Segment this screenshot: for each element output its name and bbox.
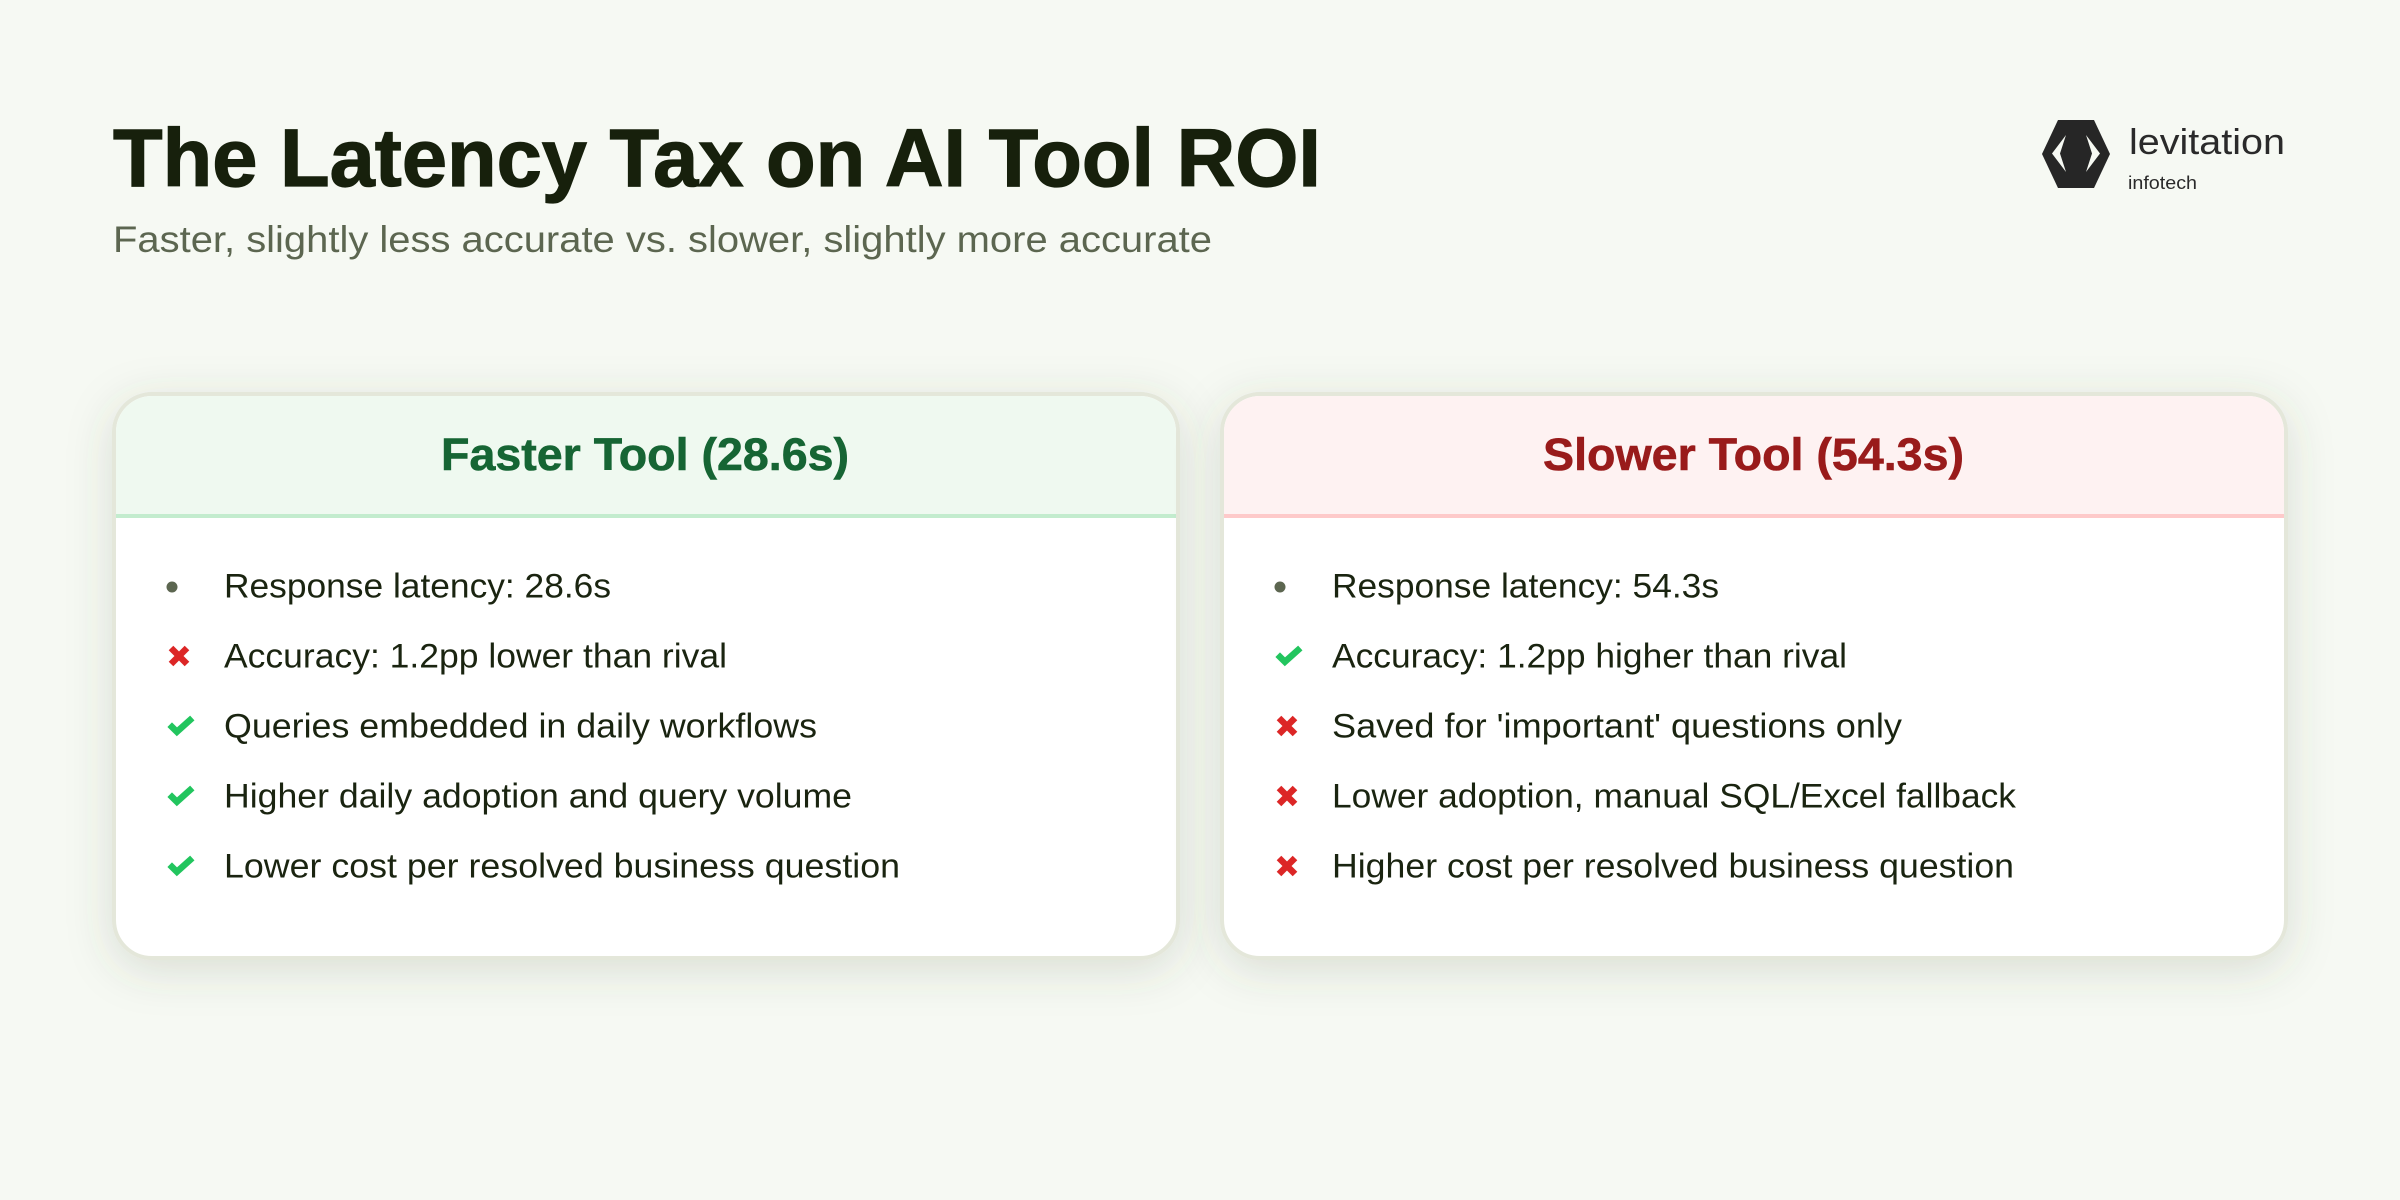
icon: check <box>1278 648 1300 662</box>
list item: Higher cost per resolved business question <box>1332 848 2014 886</box>
list item: Lower cost per resolved business question <box>224 848 900 886</box>
logo sub-wordmark: infotech <box>2128 173 2197 193</box>
list item: Response latency: 54.3s <box>1332 568 1719 606</box>
list item: Response latency: 28.6s <box>224 568 611 606</box>
icon: cross <box>171 648 187 664</box>
icon: cross <box>1279 718 1295 734</box>
list item: Lower adoption, manual SQL/Excel fallback <box>1332 778 2017 816</box>
icon: cross <box>1279 788 1295 804</box>
icon: neutral bullet <box>166 582 178 592</box>
title: The Latency Tax on AI Tool ROI <box>113 113 1321 204</box>
list item: Saved for 'important' questions only <box>1332 708 1902 746</box>
panel: faster tool <box>114 394 1178 958</box>
subtitle: Faster, slightly less accurate vs. slower, slightly more accurate <box>113 219 1212 260</box>
icon: hexagon with chevrons <box>2042 120 2110 188</box>
panel header: faster tool <box>116 396 1176 518</box>
logo wordmark: levitation <box>2129 121 2285 162</box>
panel header: faster tool: Faster Tool (28.6s) <box>441 429 849 480</box>
icon: cross <box>1279 858 1295 874</box>
list item: Higher daily adoption and query volume <box>224 778 852 816</box>
icon: check <box>170 718 192 732</box>
icon: check <box>170 858 192 872</box>
panel header: slower tool: Slower Tool (54.3s) <box>1543 429 1964 480</box>
logo: levitation infotech <box>2042 120 2285 193</box>
panel header: slower tool <box>1224 396 2284 518</box>
icon: check <box>170 788 192 802</box>
panel: slower tool <box>1222 394 2286 958</box>
list item: Queries embedded in daily workflows <box>224 708 817 746</box>
icon: neutral bullet <box>1274 582 1286 592</box>
list item: Accuracy: 1.2pp lower than rival <box>224 638 727 676</box>
list item: Accuracy: 1.2pp higher than rival <box>1332 638 1847 676</box>
